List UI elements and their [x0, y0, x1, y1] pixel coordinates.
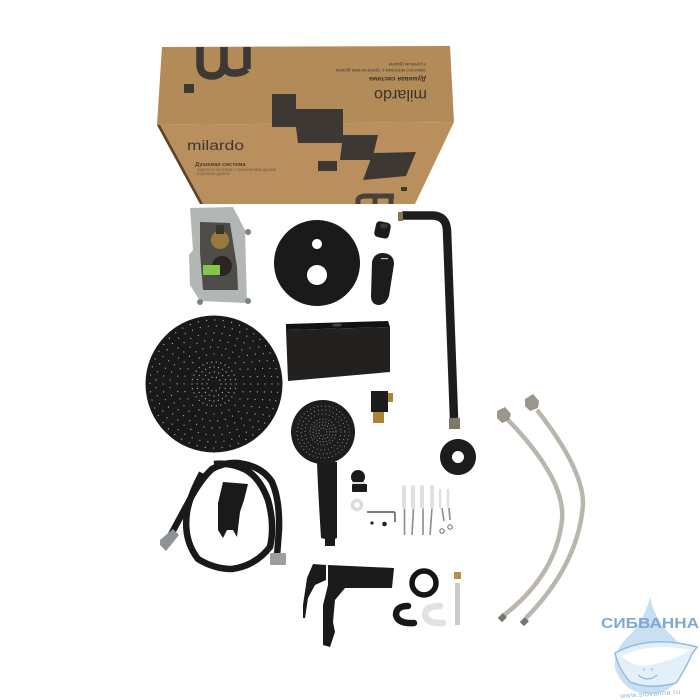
box brand name front: milardo: [187, 138, 244, 153]
arm tube: [402, 216, 454, 418]
box small logo front: [358, 196, 394, 204]
hand shower handle: [317, 462, 337, 546]
box subtitle upside-down line two: и ручным душем: [389, 61, 426, 66]
nut: [525, 394, 539, 411]
braided hose right: [520, 394, 583, 626]
white washer: [352, 500, 362, 510]
mount box hole: [332, 323, 342, 327]
elbow black body: [371, 391, 388, 412]
knob top: [380, 224, 388, 228]
valve green label: [203, 265, 220, 275]
handle highlight: [381, 258, 388, 259]
hand shower: [291, 400, 355, 546]
rod shaft: [455, 583, 460, 625]
black c-washer: [396, 606, 414, 623]
hose connector left: [160, 529, 179, 551]
white dowels: [404, 487, 448, 507]
nut: [497, 407, 511, 423]
box pattern: dark squares: [272, 94, 416, 180]
concealed valve box: [189, 207, 251, 305]
allen key: [367, 512, 395, 522]
hose braid: [503, 420, 562, 616]
hand shower holder: [218, 482, 248, 538]
box title front: Душевая система: [195, 162, 246, 168]
hose connector right: [270, 553, 286, 565]
elbow connector: [371, 391, 393, 423]
valve brass body: [211, 231, 229, 249]
knob body: [374, 221, 392, 239]
tip: [498, 613, 507, 622]
valve grey housing: [189, 207, 247, 303]
logo bathtub: [615, 642, 697, 686]
faucet lever: [303, 564, 326, 618]
hose braid: [526, 410, 583, 618]
arm steel end: [449, 418, 460, 429]
small screws: [370, 521, 387, 526]
ball plug: [351, 470, 367, 492]
box top flap: [157, 46, 454, 125]
elbow brass outlet: [373, 411, 384, 423]
box logo dot: [184, 84, 194, 93]
logo tub inner: [622, 647, 690, 666]
logo url: www.sibvanna.ru: [619, 689, 680, 700]
valve stem top: [216, 225, 224, 234]
hose coil: [168, 463, 279, 569]
white c-washer: [425, 606, 443, 623]
box logo: upside-down m: [200, 47, 247, 76]
elbow brass side: [387, 393, 393, 402]
plug base: [352, 484, 367, 492]
black sealing ring: [412, 571, 436, 595]
rectangular mount box: [286, 321, 390, 381]
logo face: [638, 668, 657, 679]
shower arm: [398, 212, 460, 429]
braided hose left: [497, 407, 562, 622]
screw two: [382, 522, 387, 526]
box title upside-down: Душевая система: [369, 75, 426, 82]
box front face: [157, 122, 454, 204]
valve dark body: [212, 256, 232, 276]
hand shower nozzles: [297, 406, 349, 458]
nozzle rings: [150, 320, 278, 448]
wall plugs and screws: [404, 487, 452, 535]
box small dot: [401, 187, 407, 191]
basin faucet: [303, 564, 394, 647]
logo water drop: [615, 597, 686, 694]
round wall plate: [274, 220, 360, 306]
head disc: [146, 316, 282, 452]
mount box front: [286, 327, 390, 381]
logo wordmark: СИБВАННА: [601, 616, 700, 632]
mount box top: [286, 321, 390, 330]
rod brass tip: [454, 572, 461, 579]
plug dome: [351, 470, 365, 484]
small rings: [440, 525, 452, 533]
box brand name upside-down: milardo: [374, 86, 427, 103]
box subtitle upside-down line one: скрытого монтажа с тропическим душем: [336, 67, 426, 72]
arm brass end: [398, 212, 403, 221]
box left edge: [157, 125, 203, 204]
box subtitle front line two: и ручным душем: [197, 171, 230, 176]
plug band: [352, 482, 365, 484]
screw one: [370, 521, 374, 525]
hand shower head: [291, 400, 355, 464]
valve housing inner: [200, 222, 238, 290]
screw shafts: [404, 508, 450, 535]
watermark logo: [601, 597, 700, 700]
tip: [520, 617, 529, 626]
panel: cardboard box: [157, 46, 454, 204]
rain shower head: [146, 316, 282, 452]
small knob: [374, 221, 392, 239]
flexible hose: [160, 463, 286, 569]
mixer handle: [371, 253, 394, 305]
valve mounting feet: [197, 229, 251, 305]
handle body: [371, 253, 394, 305]
wall flange: [440, 439, 476, 475]
faucet spout body: [323, 565, 394, 647]
steel rod: [454, 572, 461, 625]
box subtitle front line one: скрытого монтажа с тропическим душем: [197, 167, 276, 172]
